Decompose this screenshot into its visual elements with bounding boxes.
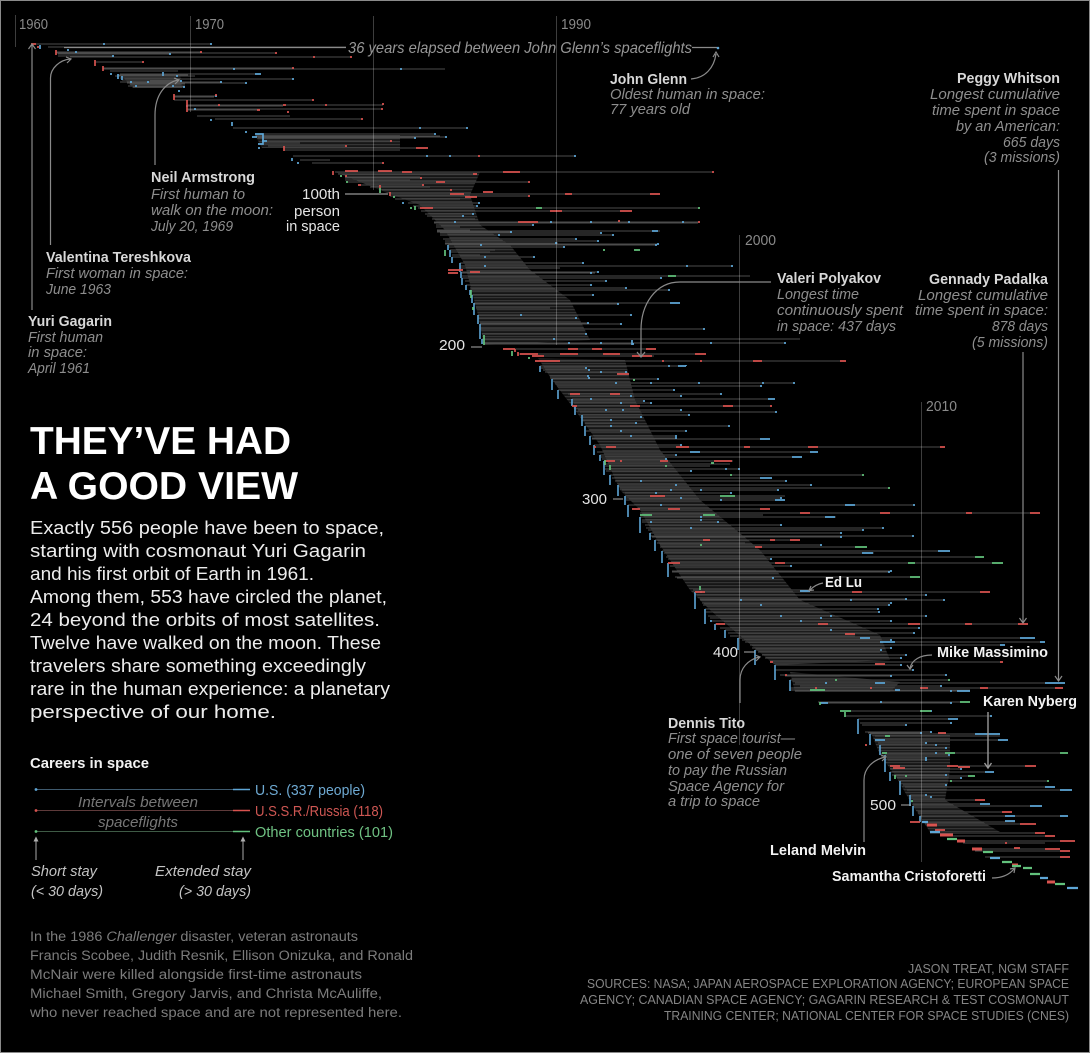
callout: 100th person in space: person xyxy=(294,204,340,220)
callout: Gennady Padalka: Gennady Padalka xyxy=(929,272,1049,288)
callout: John Glenn: John Glenn xyxy=(610,72,687,88)
axis ticks for decades xyxy=(16,15,922,862)
label: extended stay: Extended stay xyxy=(155,864,252,880)
callout: Neil Armstrong: First human to xyxy=(151,187,245,203)
callout: 100th person in space xyxy=(286,187,340,235)
arrow: Valentina Tereshkova xyxy=(50,57,71,245)
intro paragraph: perspective of our home. xyxy=(30,701,276,722)
callout: Valeri Polyakov: continuously spent xyxy=(777,303,904,319)
callout: Valentina Tereshkova: First woman in space: xyxy=(46,266,188,282)
row marker: 400 xyxy=(713,645,755,661)
callout: Yuri Gagarin xyxy=(27,314,112,377)
intro paragraph: Among them, 553 have circled the planet, xyxy=(30,586,387,607)
callout: Neil Armstrong: Neil Armstrong xyxy=(151,170,255,186)
callout: Yuri Gagarin: April 1961 xyxy=(27,361,90,377)
axis label: 1990: 1990 xyxy=(561,17,591,33)
callout: Dennis Tito: First space tourist— xyxy=(668,731,795,747)
callout: John Glenn: 77 years old xyxy=(610,102,691,118)
axis label: 2000: 2000 xyxy=(745,233,776,249)
label: short stay: Short stay xyxy=(31,864,98,880)
footnote: Challenger disaster: who never reached space and are not represented here. xyxy=(29,1005,402,1020)
callout: Valeri Polyakov: Longest time xyxy=(777,287,859,303)
callout: Valeri Polyakov xyxy=(777,271,904,335)
axis label: 1960: 1960 xyxy=(19,17,48,33)
callout: 100th person in space: 100th xyxy=(302,187,340,203)
callout: Dennis Tito: to pay the Russian xyxy=(668,763,787,779)
arrow: Leland Melvin xyxy=(864,755,886,842)
row marker: 200: 200 xyxy=(439,338,465,354)
callout: Peggy Whitson: (3 missions) xyxy=(984,150,1060,166)
callout: Gennady Padalka: 878 days xyxy=(992,319,1048,335)
arrow: Mike Massimino xyxy=(907,655,932,669)
intro paragraph: Exactly 556 people have been to space, xyxy=(30,517,384,538)
callout: Peggy Whitson: Peggy Whitson xyxy=(957,71,1060,87)
callout: 36 years elapsed: 36 years elapsed between John Glenn’s spaceflights xyxy=(348,40,692,57)
footnote: Challenger disaster xyxy=(29,929,413,1020)
credits and sources: AGENCY; CANADIAN SPACE AGENCY; GAGARIN RESEARCH & TEST COSMONAUT xyxy=(580,992,1069,1007)
row marker: 300 xyxy=(582,492,623,508)
leading edge of the staircase: first flights xyxy=(448,245,920,822)
callout: Peggy Whitson: time spent in space xyxy=(932,103,1060,119)
career marks: U.S. astronauts xyxy=(40,44,1072,821)
title: THEY’VE HAD xyxy=(30,420,291,463)
arrow: short stay xyxy=(34,838,38,860)
intro paragraph: and his first orbit of Earth in 1961. xyxy=(30,563,314,584)
career marks: other countries xyxy=(340,176,1068,802)
arrow: Samantha Cristoforetti xyxy=(992,868,1015,878)
callout: Dennis Tito: Space Agency for xyxy=(668,779,785,795)
callout: Ed Lu: Ed Lu xyxy=(825,575,862,591)
arrow: Peggy Whitson xyxy=(1055,170,1062,681)
label: short stay: (< 30 days) xyxy=(31,884,103,900)
callout: Gennady Padalka: (5 missions) xyxy=(972,335,1048,351)
callout: Mike Massimino: Mike Massimino xyxy=(937,645,1048,661)
callout: Karen Nyberg: Karen Nyberg xyxy=(983,694,1077,710)
callout: Valeri Polyakov: in space: 437 days xyxy=(777,319,896,335)
legend note: intervals between spaceflights xyxy=(78,795,198,831)
arrow: Yuri Gagarin xyxy=(28,44,36,310)
callout: Peggy Whitson: Longest cumulative xyxy=(930,87,1060,103)
axis label: 1970: 1970 xyxy=(195,17,224,33)
callout: Yuri Gagarin: First human xyxy=(28,330,103,346)
label: extended stay xyxy=(155,864,252,900)
footnote: Challenger disaster: In the 1986 Challenger disaster, veteran astronauts xyxy=(30,929,358,944)
legend row: U.S.S.R./Russia: U.S.S.R./Russia (118) xyxy=(255,804,383,820)
arrow: Ed Lu xyxy=(809,583,823,590)
callout: Gennady Padalka: Longest cumulative xyxy=(918,288,1048,304)
career marks: U.S.S.R./Russia cosmonauts xyxy=(31,44,1075,857)
callout: Valeri Polyakov: Valeri Polyakov xyxy=(777,271,881,287)
row marker: 500: 500 xyxy=(870,798,896,814)
leader: 100th person xyxy=(345,193,388,195)
row marker: 300: 300 xyxy=(582,492,607,508)
arrow: Neil Armstrong xyxy=(155,78,179,165)
callout: John Glenn xyxy=(610,72,765,118)
title: A GOOD VIEW xyxy=(30,465,298,508)
callout: Yuri Gagarin: in space: xyxy=(28,345,87,361)
legend row: U.S.: U.S. (337 people) xyxy=(255,783,365,799)
title xyxy=(30,420,298,508)
credits and sources: TRAINING CENTER; NATIONAL CENTER FOR SPACE STUDIES (CNES) xyxy=(664,1008,1069,1023)
intro paragraph: travelers share something exceedingly xyxy=(30,655,367,676)
callout: Valentina Tereshkova: Valentina Tereshkova xyxy=(46,250,192,266)
intro paragraph: rare in the human experience: a planetary xyxy=(30,678,391,699)
panel: careers in space legend xyxy=(30,756,393,900)
callout: Leland Melvin: Leland Melvin xyxy=(770,843,866,859)
callout: Dennis Tito: one of seven people xyxy=(668,747,802,763)
callout: 100th person in space: in space xyxy=(286,219,340,235)
callout: Neil Armstrong: July 20, 1969 xyxy=(150,219,233,235)
axis label: 2010: 2010 xyxy=(926,399,957,415)
callout: Peggy Whitson: 665 days xyxy=(1003,135,1060,151)
row marker: 200 xyxy=(439,338,482,354)
callout: Neil Armstrong: walk on the moon: xyxy=(151,203,273,219)
label: extended stay: (> 30 days) xyxy=(179,884,251,900)
legend note: intervals between spaceflights: spaceflights xyxy=(98,815,178,831)
arrow: Gennady Padalka xyxy=(1020,352,1026,623)
footnote: Challenger disaster: Michael Smith, Gregory Jarvis, and Christa McAuliffe, xyxy=(30,986,382,1001)
callout: Dennis Tito: a trip to space xyxy=(668,794,760,810)
credits and sources: SOURCES: NASA; JAPAN AEROSPACE EXPLORATION AGENCY; EUROPEAN SPACE xyxy=(587,976,1069,991)
row marker: 400: 400 xyxy=(713,645,738,661)
callout: Gennady Padalka: time spent in space: xyxy=(915,303,1048,319)
legend row: other countries: Other countries (101) xyxy=(255,825,393,841)
footnote: Challenger disaster: McNair were killed alongside first-time astronauts xyxy=(30,967,362,982)
arrow: Dennis Tito xyxy=(740,655,760,703)
label: short stay xyxy=(31,864,103,900)
credits and sources xyxy=(580,961,1069,1023)
arrow: Valeri Polyakov xyxy=(637,282,771,357)
callout: Peggy Whitson: by an American: xyxy=(956,119,1060,135)
callout: Dennis Tito: Dennis Tito xyxy=(668,716,745,732)
callout: Peggy Whitson xyxy=(930,71,1060,166)
staircase tail: most recent first-time flyers xyxy=(922,822,1078,888)
intro paragraph xyxy=(30,517,391,722)
callout: Samantha Cristoforetti: Samantha Cristoforetti xyxy=(832,869,986,885)
arrow: extended stay xyxy=(241,838,245,860)
row marker: 500 xyxy=(870,798,911,814)
intro paragraph: 24 beyond the orbits of most satellites. xyxy=(30,609,380,630)
arrow: John Glenn xyxy=(691,52,719,79)
callout: Dennis Tito xyxy=(668,716,802,810)
callout: Gennady Padalka xyxy=(915,272,1049,351)
callout: Neil Armstrong xyxy=(150,170,273,235)
legend note: intervals between spaceflights: Intervals between xyxy=(78,795,198,811)
callout: John Glenn: Oldest human in space: xyxy=(610,87,765,103)
footnote: Challenger disaster: Francis Scobee, Judith Resnik, Ellison Onizuka, and Ronald xyxy=(30,948,413,963)
callout: Valentina Tereshkova xyxy=(45,250,192,298)
legend heading: Careers in space xyxy=(30,756,149,772)
callout: Valentina Tereshkova: June 1963 xyxy=(45,282,111,298)
intro paragraph: Twelve have walked on the moon. These xyxy=(30,632,381,653)
arrow: Karen Nyberg xyxy=(984,712,992,768)
credits and sources: JASON TREAT, NGM STAFF xyxy=(908,961,1069,976)
intro paragraph: starting with cosmonaut Yuri Gagarin xyxy=(30,540,366,561)
callout: Yuri Gagarin: Yuri Gagarin xyxy=(28,314,112,330)
